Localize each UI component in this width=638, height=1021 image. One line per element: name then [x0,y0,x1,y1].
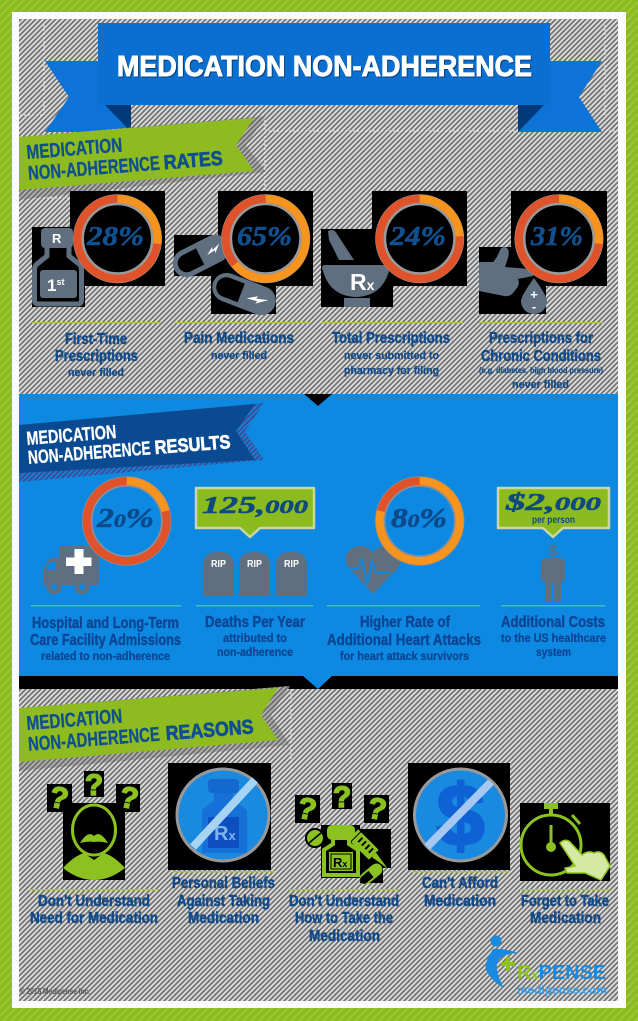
reason: forget to take: Forget to Take [521,893,609,910]
stat: additional costs [498,488,609,659]
stat: heart attacks [327,481,481,663]
icon: person with dollar head [541,543,565,602]
rates ribbon: NON-ADHERENCE [27,153,161,185]
icon: mortar and pestle: Rx [350,269,375,295]
icon: tombstones: RIP [247,559,262,570]
stat: first-time prescriptions: Prescriptions [55,348,138,365]
stat: hospital admissions: Hospital and Long-Term [32,615,179,632]
stat: first-time prescriptions [32,191,165,379]
reason: can't afford: Can't Afford [422,875,498,892]
stat: hospital admissions [30,481,181,663]
reason: can't afford: Medication [424,893,496,910]
donut 80%: 80% [391,503,447,533]
reason: personal beliefs: Medication [188,910,259,927]
reasons ribbon: NON-ADHERENCE [27,724,161,756]
stat: chronic conditions [479,191,607,391]
icon: ambulance cross [66,549,92,574]
title ribbon [45,23,602,132]
stat: additional costs: system [536,647,571,659]
callout 125,000: 125, 000 [202,493,309,519]
rates ribbon: MEDICATION [26,135,123,164]
icon: bottle, pills and syringe: ? [333,781,351,814]
icon: confused man [47,769,141,880]
reason: forget to take: Medication [530,910,601,927]
donut 24%: 24% [389,221,446,251]
results ribbon: MEDICATION [26,422,117,450]
reasons ribbon: REASONS [165,716,254,745]
stat: chronic conditions: never filled [512,379,569,391]
stat: heart attacks: Additional Heart Attacks [327,632,481,649]
icon: confused man: ? [85,769,103,802]
reason: don't understand how: How to Take the [295,910,393,927]
stat: deaths per year: Deaths Per Year [205,614,305,631]
donut 31% [519,199,599,279]
reason: personal beliefs: Against Taking [177,893,270,910]
icon: bottle, pills and syringe: ? [365,791,389,828]
rates ribbon [19,116,266,200]
donut 31%: 31% [530,221,583,251]
stat: pain medications: never filled [211,350,267,362]
results ribbon: RESULTS [154,432,231,459]
icon: bottle: R [52,231,62,246]
stat: additional costs: to the US healthcare [501,633,606,645]
stat: chronic conditions: Prescriptions for [489,330,593,347]
reason: personal beliefs [168,763,275,927]
stat: heart attacks: for heart attack survivors [340,651,469,663]
icon: bottle [32,227,85,307]
results ribbon: NON-ADHERENCE [27,438,152,469]
reason: don't understand how: Medication [309,928,380,945]
stat: deaths per year [196,488,314,659]
icon: tombstones: RIP [284,559,299,570]
icon: tombstones: RIP [211,559,226,570]
logo: RxPense: RxPENSE [517,962,606,984]
icon: person with dollar head: $ [549,543,558,560]
icon: bottle, pills and syringe: ? [295,791,319,828]
reason: don't understand how: Don't Understand [289,893,399,910]
icon: tombstones [203,552,307,596]
icon: bottle: st [56,277,64,287]
stat: chronic conditions: (e.g. diabetes, high blood pressure) [479,366,603,375]
icon: prohibited bottle: Rx [214,823,236,845]
icon: stopwatch and hand [520,803,610,881]
stat: additional costs: Additional Costs [501,614,605,631]
reason: forget to take [520,803,610,927]
icon: prohibited dollar: $ [437,768,484,864]
icon: bottle, pills and syringe: Rx [333,855,347,870]
donut 20% [87,481,167,561]
donut 28%: 28% [86,221,144,251]
rates ribbon: RATES [163,148,223,174]
title: MEDICATION NON-ADHERENCE [117,51,532,83]
stat: total prescriptions [321,191,467,377]
callout $2,000: $2, 000 [504,490,602,516]
donut 65%: 65% [237,221,292,251]
stat: hospital admissions: related to non-adherence [41,651,170,663]
icon: prohibited bottle [168,763,271,870]
donut 65% [226,199,306,279]
icon: heart [346,546,401,594]
icon: mortar and pestle [321,229,393,307]
stat: pain medications: Pain Medications [184,330,294,347]
icon: bottle: 1 [47,276,56,295]
reasons ribbon [19,686,290,771]
stat: hospital admissions: Care Facility Admissions [30,632,181,649]
panel: adherence reasons [19,686,610,945]
donut 24% [380,199,460,279]
reason: don't understand need [29,769,159,927]
icon: pills [168,230,280,319]
reason: don't understand need: Need for Medication [30,910,158,927]
icon: hand and drop: + [530,287,538,302]
stat: first-time prescriptions: never filled [68,367,124,379]
reason: don't understand need: Don't Understand [38,893,150,910]
icon: hand and drop [479,247,547,314]
donut 80% [380,481,460,561]
icon: hand and drop: - [532,299,536,314]
stat: total prescriptions: never submitted to [344,350,439,362]
stat: total prescriptions: Total Prescriptions [332,330,450,347]
callout $2,000 [498,488,609,537]
reason: don't understand how [288,781,399,945]
donut 20%: 20% [96,503,154,533]
logo: RxPense [486,936,607,997]
reason: personal beliefs: Personal Beliefs [172,875,275,892]
icon: prohibited dollar [408,763,510,870]
stat: deaths per year: attributed to [223,633,287,645]
panel: adherence rates [19,116,607,391]
icon: bottle, pills and syringe [295,781,393,887]
copyright: © 2015 Medipense Inc. [20,987,90,996]
callout $2,000: per person [532,514,575,526]
stat: heart attacks: Higher Rate of [360,614,451,631]
stat: pain medications [168,191,313,362]
callout 125,000 [196,488,314,537]
icon: ambulance [43,546,99,594]
icon: confused man: ? [117,780,141,817]
stat: deaths per year: non-adherence [217,647,293,659]
icon: confused man: ? [47,780,71,817]
panel: adherence results [19,394,618,689]
stat: total prescriptions: pharmacy for filing [344,365,439,377]
logo: RxPense: medipense.com [517,985,607,997]
reason: can't afford [408,763,510,910]
donut 28% [78,199,158,279]
reasons ribbon: MEDICATION [26,706,123,735]
stat: first-time prescriptions: First-Time [65,331,127,348]
results ribbon [19,403,264,482]
stat: chronic conditions: Chronic Conditions [481,348,601,365]
